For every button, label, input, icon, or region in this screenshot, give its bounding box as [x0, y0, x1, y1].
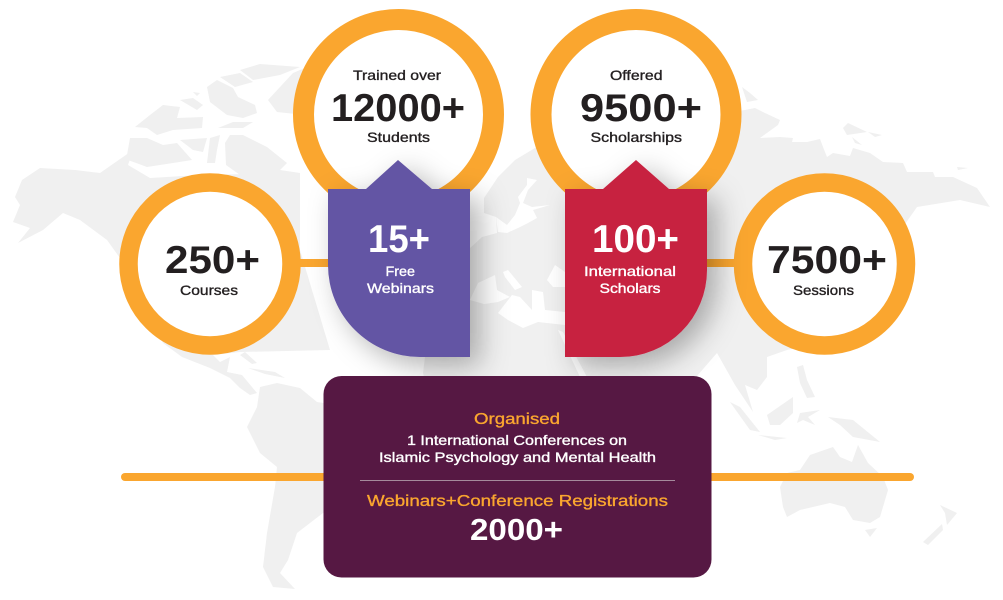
badge: free webinars — [328, 160, 470, 357]
circle: trained students — [304, 20, 494, 210]
red pentagon shape — [565, 160, 707, 357]
text: trained over 12000+ students: Students — [367, 129, 430, 145]
text: 7500+ sessions: Sessions — [793, 282, 854, 298]
badge text: International — [584, 263, 676, 279]
badge text: 15+ — [368, 218, 430, 261]
heading: registrations: Webinars+Conference Registrations — [367, 493, 668, 510]
text: 7500+ sessions: 7500+ — [767, 239, 887, 282]
text: 250+ courses: 250+ — [165, 239, 260, 282]
text: offered 9500+ scholarships: Offered — [610, 67, 662, 83]
text: offered 9500+ scholarships — [580, 67, 702, 145]
horizontal line — [121, 473, 914, 481]
badge text: Webinars — [367, 280, 434, 296]
text: 250+ courses — [165, 239, 260, 298]
purple pentagon shape — [328, 160, 470, 357]
connector line right — [700, 259, 740, 267]
circle: scholarships — [541, 20, 731, 210]
badge text — [584, 218, 679, 296]
circle: courses — [128, 182, 292, 346]
text: trained over 12000+ students: 12000+ — [331, 87, 465, 130]
badge text: Scholars — [600, 280, 660, 296]
text: 250+ courses: Courses — [180, 282, 238, 298]
circle: sessions — [743, 182, 906, 346]
text: offered 9500+ scholarships: Scholarships — [590, 129, 682, 145]
conference description — [379, 432, 656, 465]
connector line left — [295, 259, 335, 267]
conference description: Islamic Psychology and Mental Health — [379, 449, 656, 465]
panel: conferences — [324, 376, 712, 578]
number: 2000+: 2000+ — [470, 512, 563, 547]
text: trained over 12000+ students — [331, 67, 465, 145]
text: offered 9500+ scholarships: 9500+ — [580, 87, 702, 130]
badge text — [367, 218, 434, 296]
text: trained over 12000+ students: Trained over — [353, 67, 441, 83]
badge text: 100+ — [592, 218, 679, 261]
conference description: 1 International Conferences on — [407, 432, 627, 448]
badge: international scholars — [565, 160, 707, 357]
heading: organised: Organised — [474, 411, 560, 428]
text: 7500+ sessions — [767, 239, 887, 298]
badge text: Free — [386, 263, 415, 279]
